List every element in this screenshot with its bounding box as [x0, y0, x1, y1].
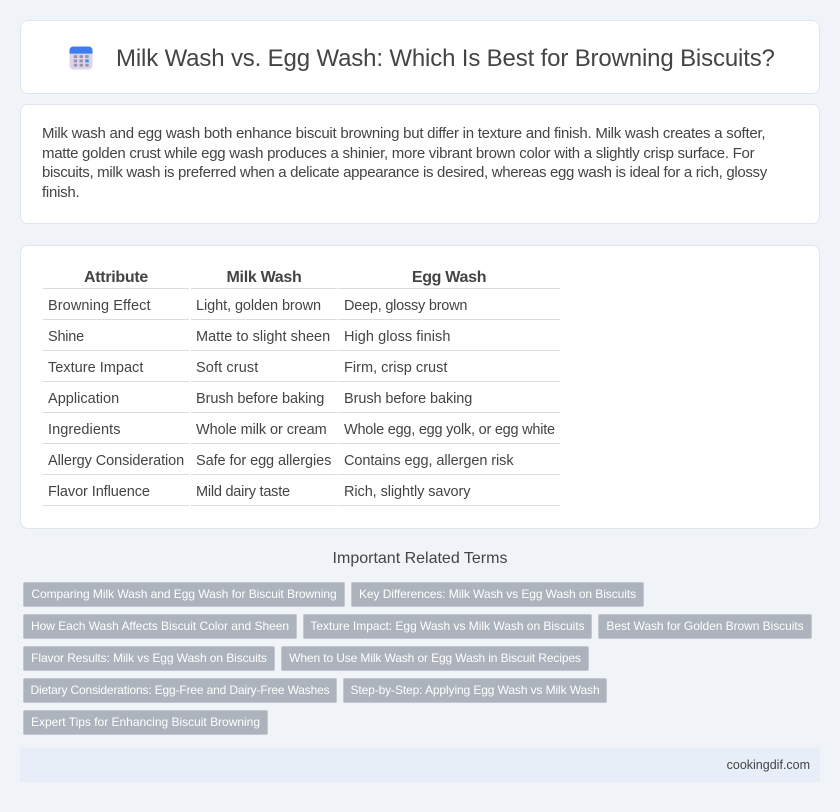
- table rows: Matte to slight sheen: [196, 329, 330, 345]
- related term tags: Key Differences: Milk Wash vs Egg Wash on Biscuits: [359, 587, 636, 601]
- summary text: [42, 125, 768, 200]
- related term tags: How Each Wash Affects Biscuit Color and Sheen: [31, 619, 289, 633]
- table rows: Deep, glossy brown: [344, 298, 467, 314]
- table rows: Contains egg, allergen risk: [344, 453, 514, 469]
- heading: related terms: Important Related Terms: [333, 550, 507, 567]
- table rows: High gloss finish: [344, 329, 450, 345]
- table rows: Texture Impact: [48, 360, 143, 376]
- related term tags: Texture Impact: Egg Wash vs Milk Wash on Biscuits: [310, 619, 585, 633]
- summary text: finish.: [42, 184, 79, 200]
- table rows: Rich, slightly savory: [344, 484, 470, 500]
- table rows: Browning Effect: [48, 298, 151, 314]
- table rows: Safe for egg allergies: [196, 453, 331, 469]
- table rows: Brush before baking: [196, 391, 324, 407]
- summary text: Milk wash and egg wash both enhance biscuit browning but differ in texture and finish. Milk wash creates a softer,: [42, 125, 765, 142]
- table header: [84, 269, 486, 286]
- related term tags: Dietary Considerations: Egg-Free and Dairy-Free Washes: [30, 683, 330, 697]
- table rows: Shine: [48, 329, 84, 345]
- header panel: [20, 20, 820, 94]
- table rows: Soft crust: [196, 360, 258, 376]
- related term tags: Expert Tips for Enhancing Biscuit Browning: [31, 715, 260, 729]
- table rows: Mild dairy taste: [196, 484, 290, 500]
- table header: Egg Wash: [412, 269, 486, 286]
- table rows: Whole milk or cream: [196, 422, 327, 438]
- table rows: Firm, crisp crust: [344, 360, 447, 376]
- related term tags: Step-by-Step: Applying Egg Wash vs Milk Wash: [350, 683, 600, 697]
- table rows: Whole egg, egg yolk, or egg white: [344, 422, 555, 438]
- panel: summary: [20, 104, 820, 224]
- related term tags: When to Use Milk Wash or Egg Wash in Biscuit Recipes: [289, 651, 581, 665]
- table rows: [43, 288, 560, 506]
- panel: comparison table: [20, 245, 820, 529]
- footer: [20, 748, 820, 782]
- table rows: Light, golden brown: [196, 298, 321, 314]
- summary text: biscuits, milk wash is preferred when a delicate appearance is desired, whereas egg wash is ideal for a rich, glossy: [42, 164, 767, 181]
- table header: Attribute: [84, 269, 148, 286]
- table rows: Allergy Consideration: [48, 453, 184, 469]
- table rows: Flavor Influence: [48, 484, 150, 500]
- table header: Milk Wash: [227, 269, 301, 286]
- related term tags: Flavor Results: Milk vs Egg Wash on Biscuits: [31, 651, 267, 665]
- footer brand: cookingdif.com: [727, 758, 810, 772]
- related term tags: [23, 582, 812, 735]
- table rows: Application: [48, 391, 119, 407]
- table rows: Ingredients: [48, 422, 121, 438]
- title: Milk Wash vs. Egg Wash: Which Is Best for Browning Biscuits?: [116, 45, 775, 72]
- icon: calendar: [69, 46, 93, 70]
- table rows: Brush before baking: [344, 391, 472, 407]
- summary text: matte golden crust while egg wash produces a shinier, more vibrant brown color with a slightly crisp surface. For: [42, 144, 754, 162]
- related term tags: Comparing Milk Wash and Egg Wash for Biscuit Browning: [31, 587, 337, 601]
- related term tags: Best Wash for Golden Brown Biscuits: [606, 619, 804, 633]
